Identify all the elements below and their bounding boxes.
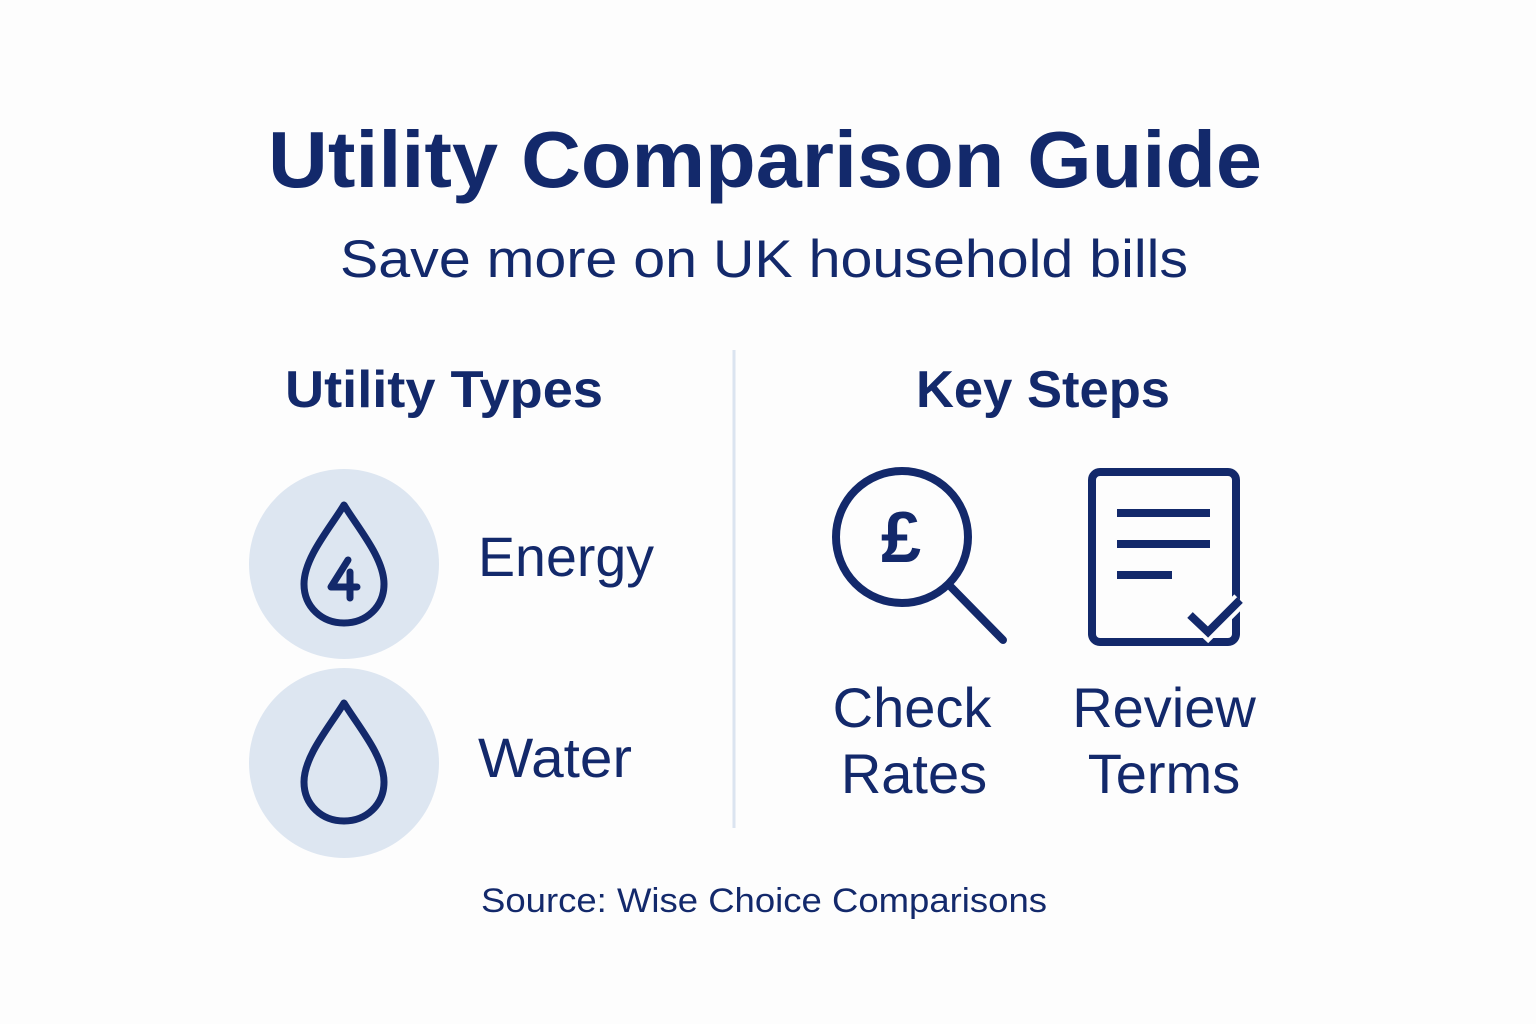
icon: document with check	[1092, 472, 1240, 642]
step: check rates: Rates	[841, 742, 987, 805]
icon: magnifier with pound: £	[881, 498, 921, 578]
label: water: Water	[478, 726, 632, 789]
subtitle: Save more on UK household bills	[340, 230, 1188, 289]
source: Source: Wise Choice Comparisons	[481, 882, 1047, 920]
step: review terms	[1072, 472, 1256, 805]
panel: utility types	[249, 361, 654, 858]
label: energy: Energy	[478, 525, 654, 588]
label: review terms: Review	[1072, 676, 1256, 739]
step: check rates	[833, 471, 1003, 805]
title: Utility Comparison Guide	[268, 115, 1262, 204]
item: water	[249, 668, 632, 858]
step: review terms: Terms	[1088, 742, 1240, 805]
heading: utility types: Utility Types	[285, 361, 603, 419]
label: check rates: Check	[833, 676, 992, 739]
icon: water drop	[249, 668, 439, 858]
item: energy	[249, 469, 654, 659]
divider	[732, 350, 736, 828]
icon: energy drop	[249, 469, 439, 659]
icon: magnifier with pound	[836, 471, 1003, 640]
panel: key steps	[833, 361, 1256, 805]
heading: key steps: Key Steps	[916, 361, 1170, 419]
